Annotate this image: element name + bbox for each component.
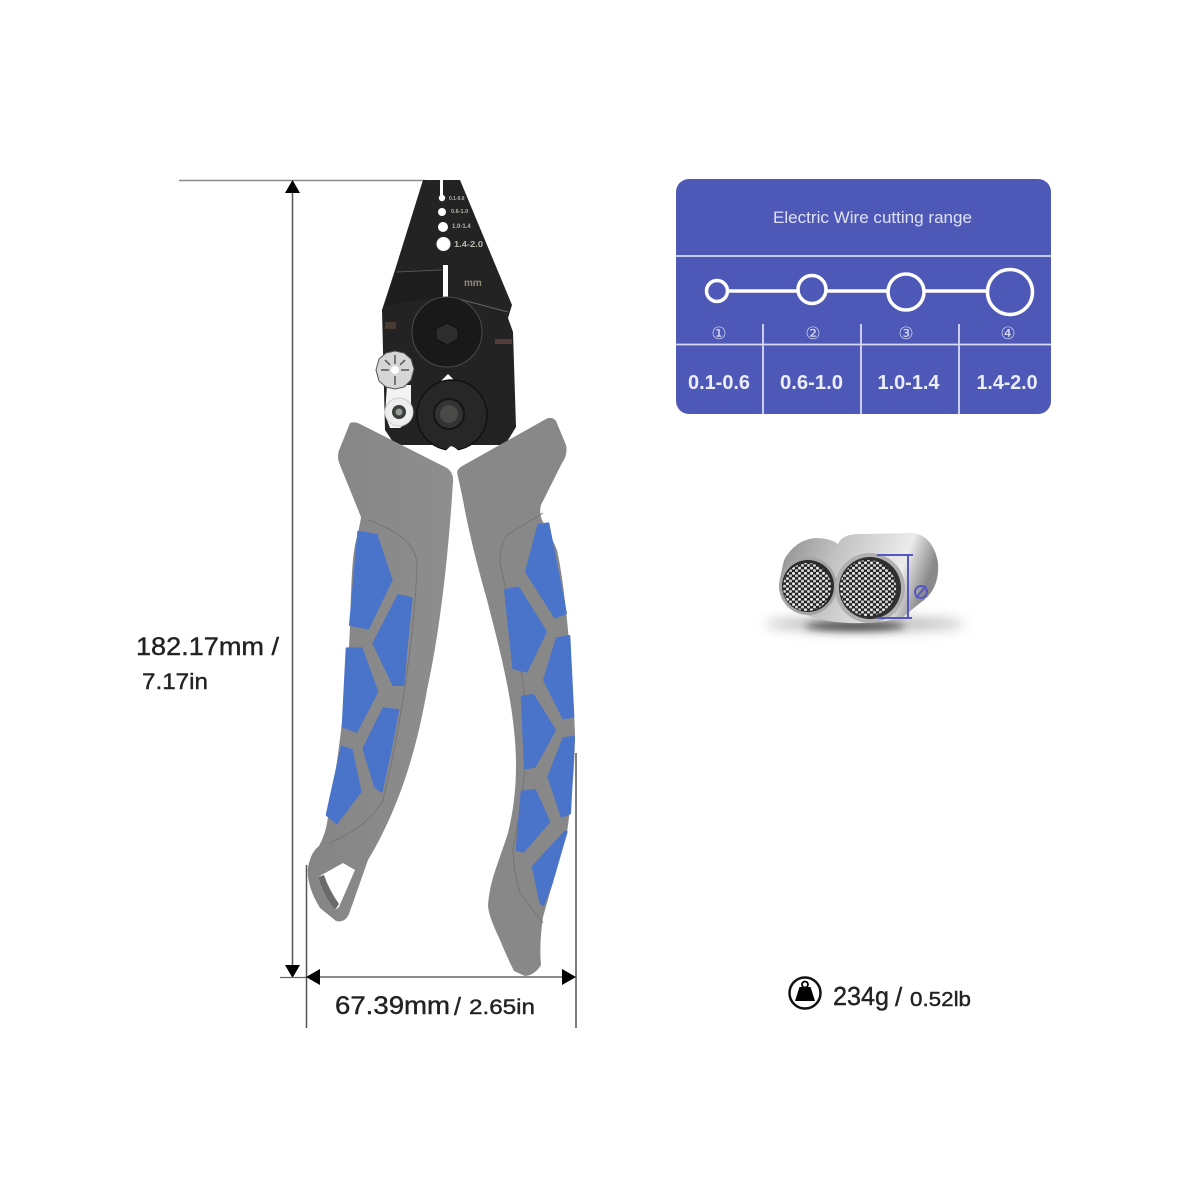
height label: 182.17mm / bbox=[136, 633, 279, 661]
range values bbox=[688, 372, 1038, 394]
width label: 67.39mm bbox=[335, 992, 450, 1020]
diameter marker bbox=[877, 555, 927, 618]
circled numbers: ① bbox=[711, 324, 727, 344]
jaw size marks: 0.1-0.6 bbox=[449, 196, 465, 202]
range values: 0.6-1.0 bbox=[780, 372, 843, 394]
wire cutting holes bbox=[436, 180, 450, 298]
range values: 1.4-2.0 bbox=[976, 372, 1038, 394]
jaw size marks: 0.6-1.0 bbox=[451, 209, 468, 215]
wire size diagram bbox=[706, 270, 1032, 314]
panel title: Electric Wire cutting range bbox=[773, 208, 972, 227]
jaw size marks bbox=[449, 196, 483, 289]
pliers bbox=[308, 180, 575, 976]
width label: 2.65in bbox=[469, 996, 535, 1019]
left handle bbox=[308, 422, 453, 921]
weight label: / bbox=[895, 982, 903, 1012]
range values: 1.0-1.4 bbox=[878, 372, 940, 394]
weight label bbox=[790, 978, 971, 1012]
panel dividers bbox=[676, 256, 1051, 414]
height label: 7.17in bbox=[142, 669, 208, 694]
width label bbox=[335, 992, 535, 1021]
weight label: 234g bbox=[833, 981, 889, 1011]
width label: / bbox=[454, 993, 461, 1021]
lanyard hole bbox=[318, 863, 355, 910]
right handle bbox=[457, 418, 575, 976]
circled numbers: ④ bbox=[1000, 324, 1016, 344]
jaw size marks: 1.4-2.0 bbox=[454, 239, 483, 249]
dimension lines: height and width bbox=[179, 180, 576, 1028]
upper pivot bbox=[412, 297, 482, 367]
range values: 0.1-0.6 bbox=[688, 372, 750, 394]
circled numbers bbox=[711, 324, 1016, 344]
circled numbers: ② bbox=[805, 324, 821, 344]
circled numbers: ③ bbox=[898, 324, 914, 344]
weight label: 0.52lb bbox=[910, 989, 971, 1011]
lower pivot bbox=[417, 374, 487, 450]
icon: weight bbox=[790, 978, 820, 1008]
blue grip pads bbox=[327, 523, 574, 905]
white latch link and wheel bbox=[376, 351, 414, 428]
panel: electric wire cutting range bbox=[676, 179, 1051, 414]
jaw size marks: mm bbox=[464, 278, 482, 289]
height label bbox=[136, 633, 279, 694]
pliers head bbox=[376, 180, 516, 468]
wire cross-section image bbox=[765, 533, 965, 631]
jaw size marks: 1.0-1.4 bbox=[452, 224, 471, 230]
